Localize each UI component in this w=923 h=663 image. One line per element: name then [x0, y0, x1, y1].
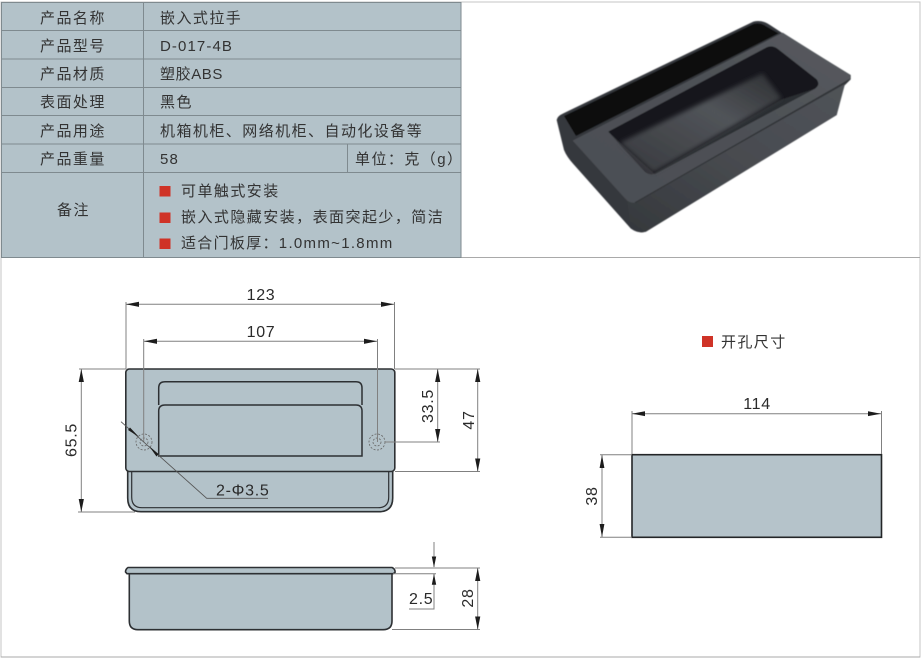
- extension lines: [392, 568, 480, 630]
- cutout rectangle: [632, 455, 882, 537]
- row: notes: 适合门板厚：1.0mm~1.8mm: [181, 234, 394, 252]
- extension lines: [78, 302, 480, 512]
- row: weight: [40, 151, 464, 168]
- row: weight: 产品重量: [40, 151, 106, 168]
- dimension 33.5: [420, 369, 440, 442]
- row: weight: 58: [160, 151, 179, 168]
- dimension 2.5: [409, 542, 436, 609]
- row: material: 产品材质: [40, 66, 106, 83]
- extension lines: [600, 411, 882, 537]
- mounting holes: [136, 434, 385, 450]
- heading: cutout size: 开孔尺寸: [721, 334, 787, 351]
- dimension 2.5: 2.5: [409, 591, 433, 608]
- row: surface: [40, 94, 193, 111]
- dimension 28: [460, 568, 480, 630]
- handle recess: [159, 382, 362, 405]
- dimension 114: 114: [743, 396, 771, 413]
- row: notes: [57, 183, 444, 252]
- dimension 114: [632, 396, 881, 416]
- row: product name: [40, 10, 242, 27]
- row: usage: 产品用途: [40, 123, 106, 140]
- row: surface: 表面处理: [40, 94, 106, 111]
- row: weight: 单位：克（g）: [355, 151, 464, 168]
- dimension 123: [126, 287, 394, 307]
- hole callout 2-Φ3.5: [121, 422, 269, 500]
- dimension 65.5: [64, 369, 84, 512]
- row: model: D-017-4B: [160, 38, 233, 55]
- specification table: [1, 2, 464, 258]
- row: material: [40, 66, 223, 83]
- row: model: 产品型号: [40, 38, 106, 55]
- hole callout 2-Φ3.5: 2-Φ3.5: [216, 482, 269, 500]
- row: usage: 机箱机柜、网络机柜、自动化设备等: [160, 122, 423, 140]
- row: material: 塑胶ABS: [160, 66, 223, 83]
- cutout size drawing: [584, 334, 882, 537]
- dimension 65.5: 65.5: [64, 423, 80, 457]
- dimension 33.5: 33.5: [420, 389, 437, 423]
- row: model: [40, 38, 233, 55]
- dimension 47: 47: [461, 410, 478, 430]
- row: product name: 产品名称: [40, 10, 106, 27]
- row: usage: [40, 122, 423, 140]
- dimension 38: 38: [584, 486, 601, 506]
- dimension 28: 28: [460, 588, 477, 608]
- body: [129, 573, 392, 630]
- row: notes: 备注: [57, 202, 90, 219]
- product photo: black recessed handle: [557, 21, 851, 232]
- row: notes: 嵌入式隐藏安装，表面突起少，简洁: [181, 209, 444, 226]
- lower tray: [128, 470, 393, 512]
- side view drawing: [126, 542, 480, 630]
- top flange: [126, 369, 395, 472]
- dimension 47: [461, 369, 480, 472]
- row: surface: 黑色: [160, 94, 193, 111]
- dimension 123: 123: [247, 287, 275, 304]
- front view drawing: [64, 287, 480, 512]
- dimension 38: [584, 455, 604, 537]
- dimension 107: 107: [247, 324, 275, 341]
- dimension 107: [144, 324, 377, 344]
- row: notes: 可单触式安装: [181, 183, 280, 200]
- flange lip: [126, 568, 395, 574]
- row: product name: 嵌入式拉手: [160, 10, 242, 27]
